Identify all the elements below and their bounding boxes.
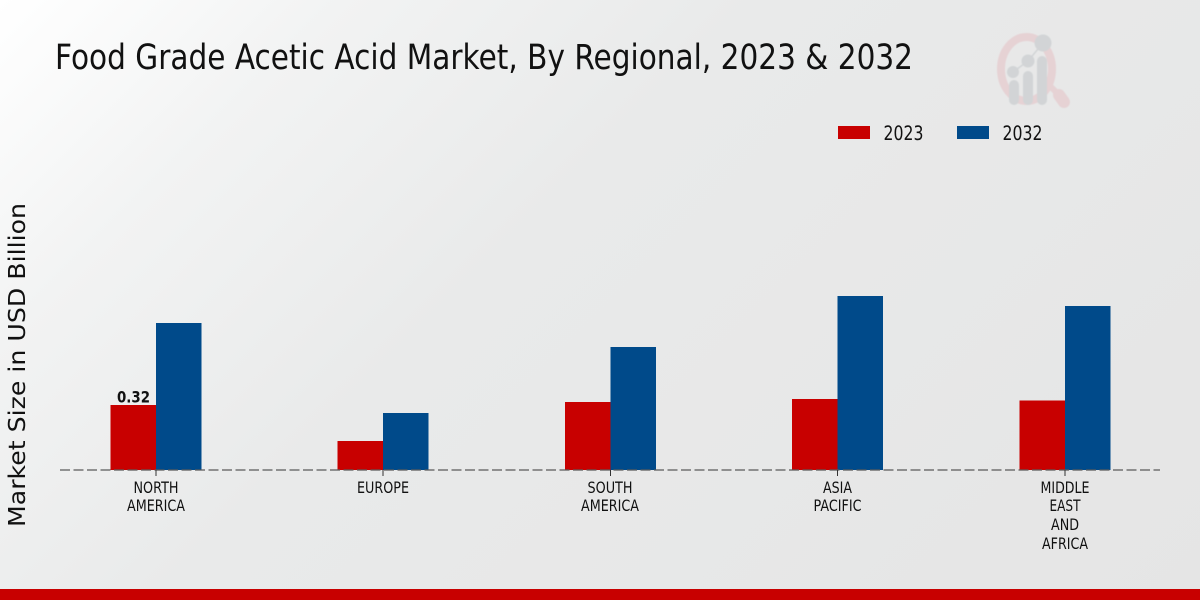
x-axis label: Middle East and Africa: EAST bbox=[1050, 496, 1081, 515]
x-axis label: Middle East and Africa: AFRICA bbox=[1042, 534, 1088, 553]
x-axis label: South America bbox=[581, 478, 639, 515]
legend item: 2032 bbox=[957, 122, 1042, 145]
bars: North America bbox=[110, 323, 202, 470]
bars: Europe bbox=[338, 413, 428, 470]
x-axis label: Asia Pacific: ASIA bbox=[823, 478, 852, 497]
x-axis label: Asia Pacific bbox=[814, 478, 862, 515]
bars: South America bbox=[565, 347, 656, 470]
legend item: 2032: 2032 bbox=[1002, 122, 1042, 145]
title: Food Grade Acetic Acid Market, By Regional, 2023 & 2032 bbox=[55, 38, 913, 78]
x-axis label: North America bbox=[127, 478, 185, 515]
icon: magnifier logo watermark bbox=[1001, 34, 1064, 105]
x-axis label: Middle East and Africa bbox=[1040, 478, 1090, 553]
x-axis label: Europe: EUROPE bbox=[357, 478, 409, 497]
x-axis label: North America: NORTH bbox=[134, 478, 178, 497]
x-axis label: South America: AMERICA bbox=[581, 496, 639, 515]
bars: Asia Pacific bbox=[792, 296, 883, 470]
legend item: 2023 bbox=[838, 122, 924, 145]
x-axis label: South America: SOUTH bbox=[588, 478, 632, 497]
x-axis label: North America: AMERICA bbox=[127, 496, 185, 515]
footer bar bbox=[0, 589, 1200, 600]
x-axis label: Middle East and Africa: AND bbox=[1051, 515, 1079, 534]
data label: 0.32: 0.32 bbox=[117, 388, 150, 406]
x-axis label: Asia Pacific: PACIFIC bbox=[814, 496, 862, 515]
legend item: 2023: 2023 bbox=[884, 122, 924, 145]
y-axis title: Market Size in USD Billion bbox=[3, 203, 31, 527]
bars: Middle East and Africa bbox=[1020, 306, 1110, 470]
x-axis label: Middle East and Africa: MIDDLE bbox=[1040, 478, 1090, 497]
bar chart bbox=[60, 296, 1160, 476]
legend bbox=[838, 122, 1042, 145]
